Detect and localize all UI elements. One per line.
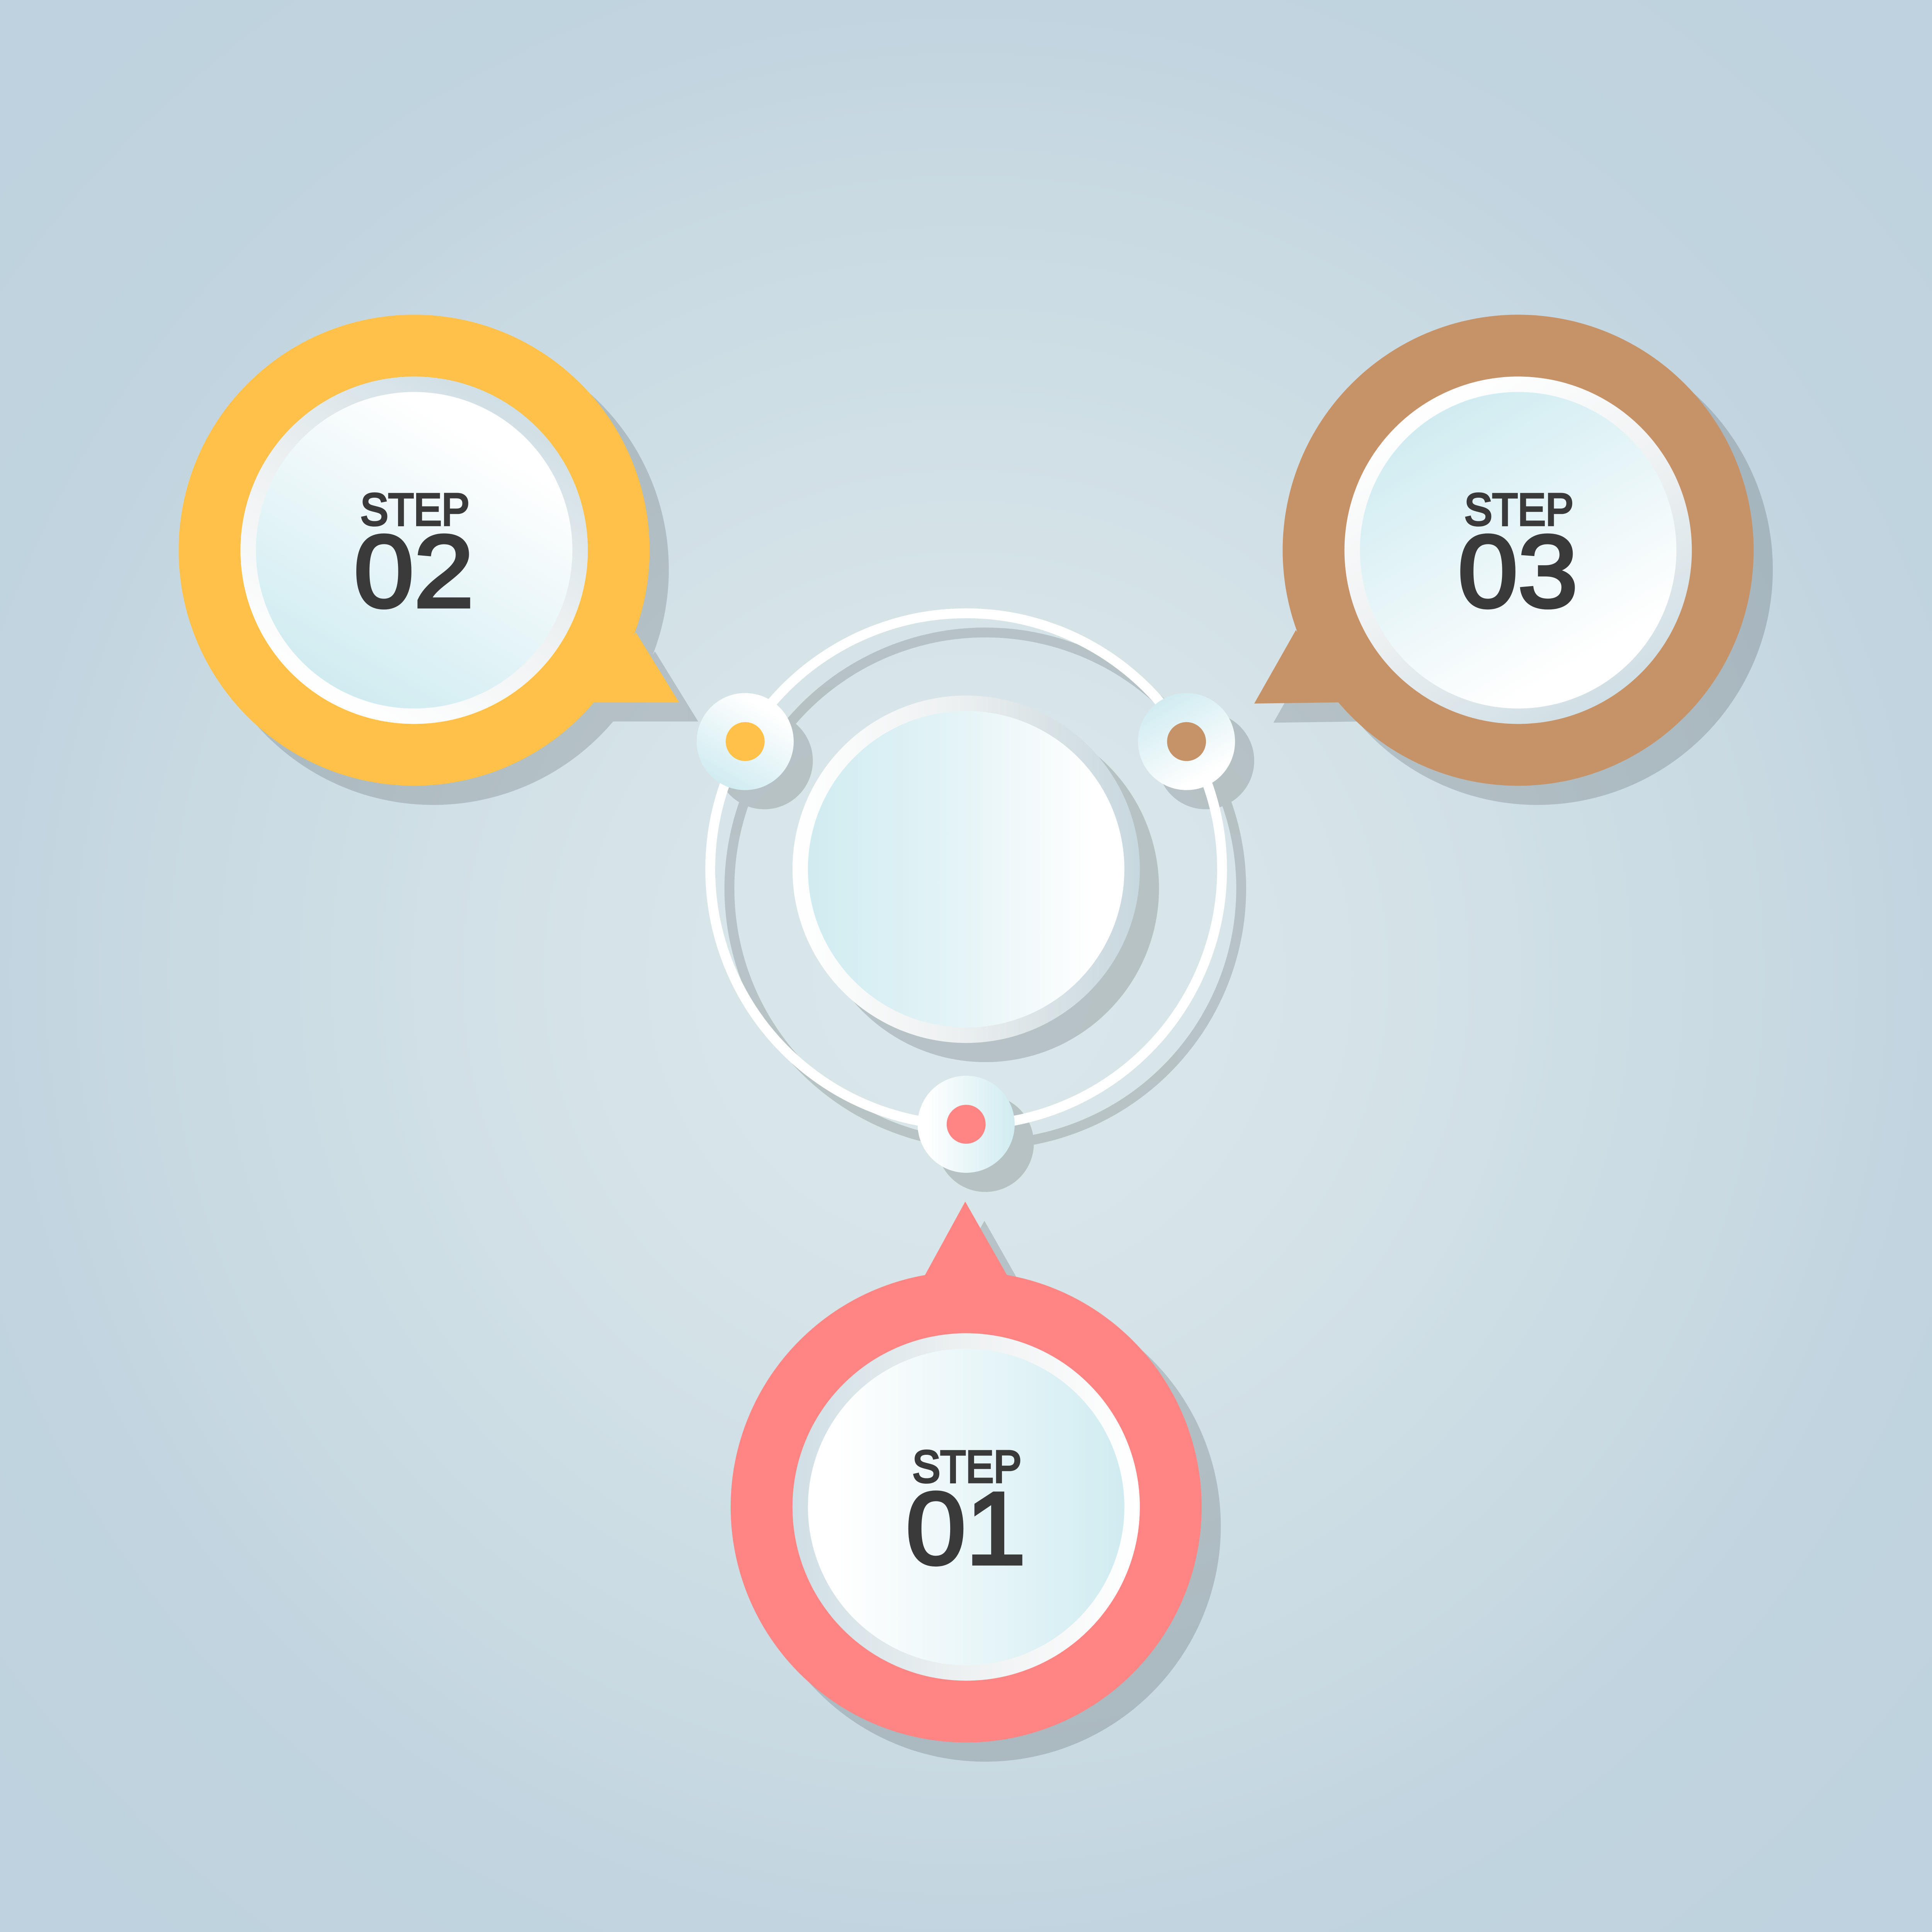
node: pink connector bbox=[918, 1076, 1015, 1173]
step 01 label: STEP bbox=[912, 1441, 1022, 1492]
panel: step 02 callout bbox=[179, 315, 679, 786]
step 01 disc bbox=[808, 1349, 1124, 1665]
connecting ring bbox=[710, 613, 1222, 1125]
step 02 ring bbox=[240, 376, 588, 724]
step 03 number: 03 bbox=[1458, 514, 1578, 629]
step 01 number: 01 bbox=[906, 1471, 1026, 1586]
step 02 disc bbox=[256, 392, 572, 709]
node: yellow connector bbox=[697, 693, 794, 790]
step 03 label: STEP bbox=[1464, 484, 1573, 535]
brown speech bubble bbox=[1254, 315, 1753, 786]
central circle bbox=[793, 696, 1140, 1043]
step 01 ring bbox=[793, 1333, 1140, 1681]
node: brown connector bbox=[1138, 693, 1235, 790]
panel: step 01 callout bbox=[731, 1202, 1202, 1743]
panel: step 03 callout bbox=[1254, 315, 1753, 786]
yellow speech bubble bbox=[179, 315, 679, 786]
step 02 label: STEP bbox=[361, 484, 469, 535]
step 03 disc bbox=[1360, 392, 1677, 709]
step 02 number: 02 bbox=[354, 514, 474, 629]
shadows of all shapes bbox=[198, 334, 1773, 1762]
step 03 ring bbox=[1344, 376, 1692, 724]
pink speech bubble bbox=[731, 1202, 1202, 1743]
